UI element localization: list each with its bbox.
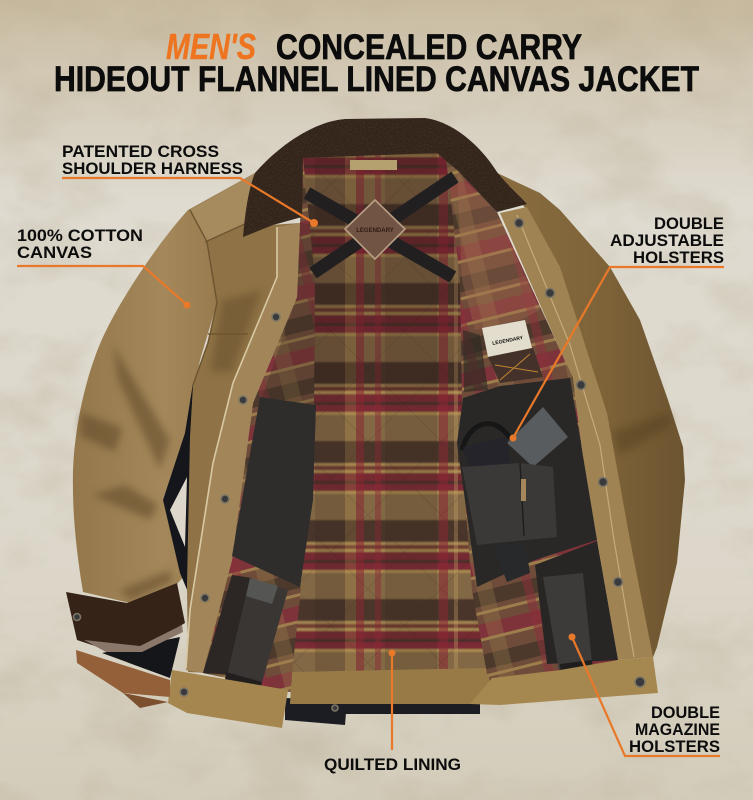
corduroy cuff (66, 583, 185, 650)
black side gusset (163, 383, 197, 592)
callout: double adjustable holsters: HOLSTERS (633, 249, 724, 267)
black back of jacket below hem (285, 698, 480, 725)
chest shadow (210, 290, 262, 372)
snap buttons (74, 218, 645, 711)
cuff (66, 583, 185, 708)
callout: patented cross shoulder harness: PATENTED CROSS (62, 143, 219, 161)
armhole seam (190, 210, 248, 385)
left placket (186, 223, 300, 673)
callout: double magazine holsters: DOUBLE (651, 704, 720, 722)
hanger loop (350, 160, 397, 170)
holster strap loop (462, 424, 510, 450)
right placket stitching (517, 215, 634, 657)
callout: double adjustable holsters: DOUBLE (654, 215, 724, 233)
collar (243, 118, 527, 237)
lower right plaid (472, 563, 548, 674)
callout: double magazine holsters: MAGAZINE (635, 721, 720, 739)
callout: 100% cotton canvas (17, 227, 190, 308)
right inner label: LEGENDARY (492, 335, 524, 347)
tan leather flap (76, 650, 170, 697)
pistol grip (507, 407, 568, 467)
yoke (190, 173, 270, 242)
callout: double magazine holsters: HOLSTERS (629, 738, 720, 756)
callout: patented cross shoulder harness (62, 143, 318, 227)
callout: 100% cotton canvas: CANVAS (17, 244, 92, 262)
black cuff lining (102, 637, 180, 678)
jacket illustration (66, 118, 685, 728)
left hem (168, 670, 288, 728)
diamond leather patch (345, 200, 405, 259)
callout: double magazine holsters (568, 634, 720, 756)
ccw badge (488, 348, 543, 383)
pistol holster (462, 407, 568, 582)
callout: 100% cotton canvas: 100% COTTON (17, 227, 143, 245)
pistol slide top (463, 437, 510, 468)
holster pocket (462, 463, 557, 545)
center quilted plaid lining (291, 153, 486, 682)
callout: patented cross shoulder harness: SHOULDER HARNESS (62, 160, 243, 178)
left fleece panel (232, 397, 316, 587)
holster tag (521, 479, 526, 501)
title word: men's: MEN'S (166, 26, 256, 67)
lower left plaid (233, 558, 301, 692)
left placket piping (186, 227, 277, 668)
diamond leather patch: LEGENDARY (356, 228, 394, 234)
title line one: CONCEALED CARRY (276, 28, 582, 67)
callout: double adjustable holsters: ADJUSTABLE (610, 232, 724, 250)
plaid lining base (203, 158, 618, 692)
right sleeve fold (612, 412, 672, 455)
shadow beside right lining (463, 330, 488, 392)
cross shoulder harness straps (307, 177, 455, 277)
left magazine holster backing (203, 575, 252, 675)
title (54, 26, 699, 99)
upper left lining shadow (262, 223, 315, 405)
left front body panel (187, 173, 300, 673)
right magazine holster (535, 541, 618, 678)
right fleece panel (457, 378, 597, 587)
leather tab (123, 693, 168, 708)
callout: quilted lining: QUILTED LINING (324, 756, 461, 774)
upper right lining highlights (457, 173, 540, 330)
gap between sleeve and body (170, 477, 187, 547)
right inner label (482, 320, 532, 357)
right sleeve (495, 172, 685, 660)
left sleeve (73, 173, 255, 603)
hem band center (290, 668, 492, 704)
right placket (500, 207, 653, 660)
callout: quilted lining (324, 650, 461, 774)
callout: double adjustable holsters (510, 215, 724, 442)
pistol barrel end (493, 542, 530, 582)
right hem (470, 657, 658, 705)
sleeve folds (80, 345, 172, 600)
left magazine holster pouch (224, 578, 288, 697)
